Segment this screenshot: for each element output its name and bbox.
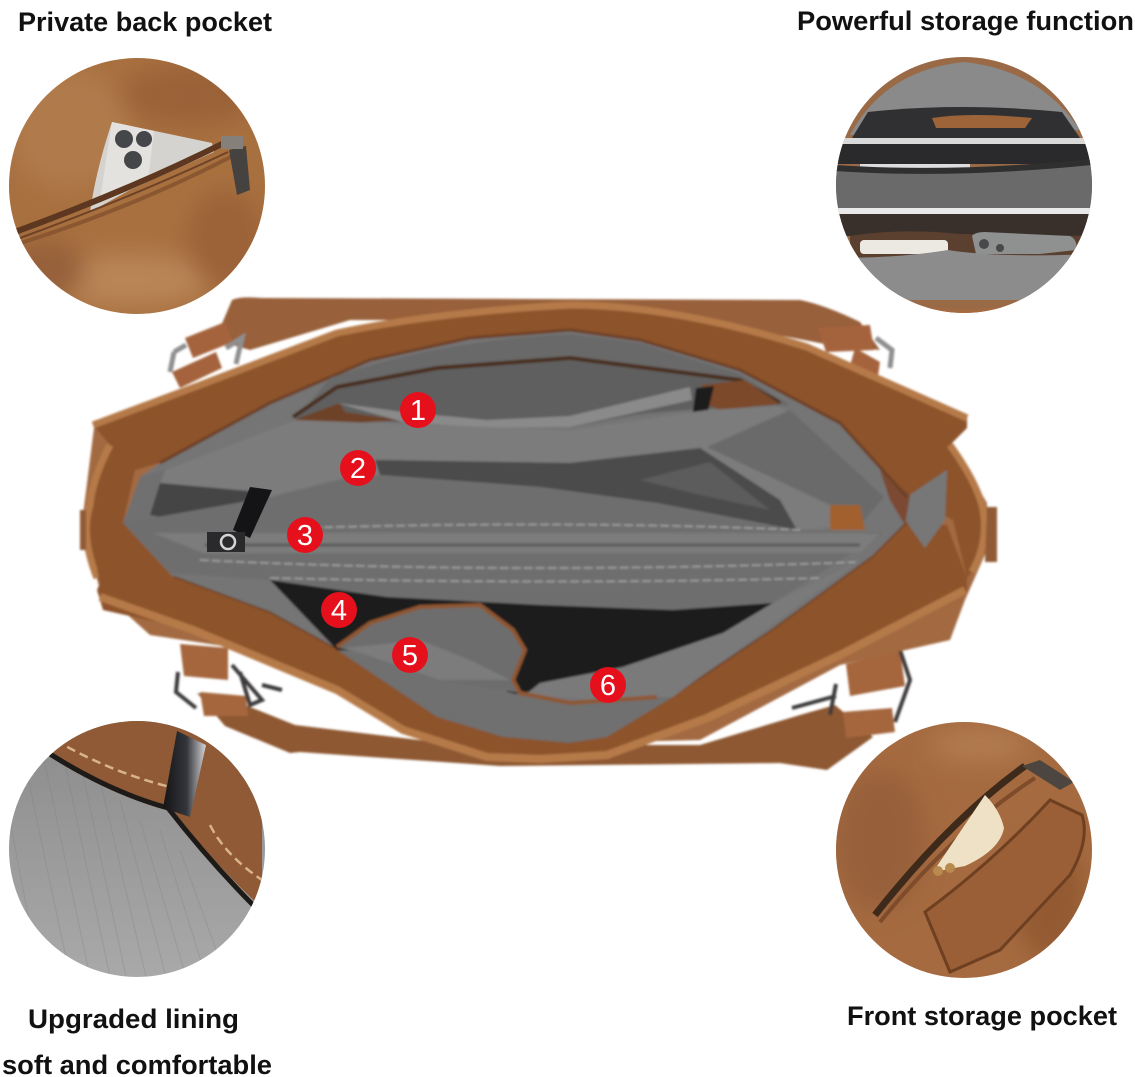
heading: front storage pocket: Front storage pocket (847, 1001, 1117, 1031)
marker 1: 1 (410, 395, 426, 427)
pocket 5 flap (337, 605, 657, 703)
marker 5: 5 (402, 640, 418, 672)
right tab (830, 505, 865, 530)
right fold (707, 410, 884, 525)
left gusset (123, 470, 207, 530)
back pocket 1 (293, 358, 780, 428)
marker 3 (287, 517, 323, 553)
zipper pull (207, 487, 272, 552)
front rim light edge (100, 590, 965, 759)
lower right lining (525, 560, 860, 700)
front left straps (176, 644, 282, 716)
front right straps (792, 650, 910, 738)
circle: private back pocket detail (5, 58, 265, 314)
marker 4: 4 (331, 595, 347, 627)
back handle right straps (818, 325, 892, 376)
back handle (215, 297, 880, 350)
main zipper pocket (123, 475, 883, 610)
marker 2 (340, 450, 376, 486)
bag (80, 297, 997, 770)
dark slot left (150, 483, 270, 530)
side tabs (80, 510, 86, 550)
marker 2: 2 (350, 453, 366, 485)
marker 6: 6 (600, 670, 616, 702)
top rim outer (83, 305, 987, 583)
marker 3: 3 (297, 520, 313, 552)
back handle left straps (170, 322, 242, 388)
bag artwork (80, 297, 997, 770)
marker 1 (400, 392, 436, 428)
marker 6 (590, 667, 626, 703)
phone (90, 122, 214, 212)
black compartment (270, 580, 773, 695)
zipper line around opening (160, 330, 907, 497)
interior lining base (123, 330, 947, 743)
mid lining (160, 406, 884, 530)
marker 4 (321, 592, 357, 628)
bag body behind rims (82, 420, 987, 745)
circle: storage function detail (836, 57, 1092, 320)
heading: upgraded lining: Upgraded lining (28, 1004, 239, 1034)
front rim (97, 523, 967, 761)
circle: upgraded lining detail (0, 721, 265, 977)
back upper lining (295, 334, 790, 420)
top rim light edge (93, 305, 967, 425)
left leather wall (97, 523, 173, 583)
marker 5 (392, 637, 428, 673)
front handle (197, 693, 873, 770)
heading: powerful storage function: Powerful storage function (797, 6, 1134, 36)
circle: front storage pocket detail (835, 722, 1092, 978)
heading: private back pocket: Private back pocket (18, 7, 272, 37)
lower lining (337, 650, 673, 743)
dark slot 2 (375, 448, 797, 530)
